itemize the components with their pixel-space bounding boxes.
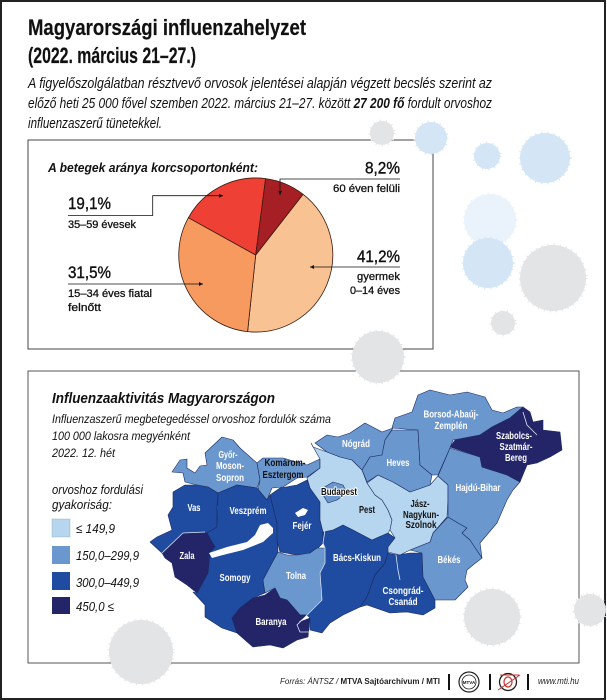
- panel: age groups frame: [28, 140, 433, 349]
- callout: 35-59 years: [68, 194, 223, 231]
- county labels: Fejér: [292, 521, 312, 532]
- legend: orvoshoz fordulási: [52, 483, 144, 497]
- county labels: Csanád: [388, 597, 418, 608]
- county labels: Esztergom: [262, 470, 304, 481]
- map description: Influenzaszerű megbetegedéssel orvoshoz fordulók száma: [52, 414, 331, 426]
- county labels: Baranya: [256, 617, 287, 628]
- county labels: Szolnok: [406, 520, 437, 531]
- county labels: Moson-: [216, 461, 244, 472]
- county labels: Vas: [188, 503, 201, 514]
- icon: MTVA logo: MTVA: [463, 680, 476, 685]
- divider bar: [448, 674, 450, 690]
- intro text: influenzaszerű tünetekkel.: [28, 116, 162, 132]
- callout: 35-59 years: 35–59 évesek: [68, 219, 136, 231]
- legend: 450,0 ≤: [76, 599, 114, 614]
- title: (2022. március 21–27.): [28, 43, 196, 68]
- callout: 0-14 years: [310, 247, 401, 297]
- callout: 60 years and over: 8,2%: [365, 158, 400, 178]
- county labels: Zala: [180, 551, 195, 562]
- map description: 2022. 12. hét: [51, 448, 116, 460]
- county labels: Hajdú-Bihar: [456, 483, 501, 494]
- county shapes: [150, 390, 562, 648]
- callout: 60 years and over: 60 éven felüli: [333, 183, 400, 195]
- county labels: Nógrád: [342, 439, 370, 450]
- county labels: [180, 410, 532, 628]
- intro text: előző heti 25 000 fővel szemben 2022. március 21–27. között 27 200 fő fordult orvoshoz: [28, 96, 493, 112]
- legend: [52, 483, 144, 614]
- source line: Forrás: ÁNTSZ / MTVA Sajtóarchívum / MTI: [280, 676, 440, 686]
- county labels: Somogy: [220, 573, 251, 584]
- callout: 15-34 years: [68, 263, 203, 314]
- county labels: Bereg: [505, 453, 527, 464]
- callout: 0-14 years: 0–14 éves: [350, 285, 400, 297]
- county labels: Bács-Kiskun: [333, 553, 381, 564]
- county labels: Pest: [359, 505, 376, 516]
- county labels: Jász-: [410, 499, 430, 510]
- intro text: A figyelőszolgálatban résztvevő orvosok jelentései alapján végzett becslés szerint az: [27, 76, 493, 92]
- callout: 0-14 years: gyermek: [357, 271, 401, 283]
- callout: 15-34 years: felnőtt: [68, 302, 101, 314]
- county labels: Borsod-Abaúj-: [424, 410, 478, 420]
- map of Hungary: [150, 390, 562, 648]
- county labels: Budapest: [321, 487, 358, 498]
- title: [28, 15, 307, 68]
- callout: 15-34 years: 15–34 éves fiatal: [68, 288, 152, 300]
- county labels: Zemplén: [434, 421, 468, 432]
- panel: map frame: [28, 371, 579, 663]
- callout: 60 years and over: [280, 158, 400, 195]
- county labels: Sopron: [216, 473, 244, 484]
- map description: 100 000 lakosra megyénként: [52, 431, 191, 443]
- icon: MTVA logo: [459, 672, 479, 692]
- county labels: Szatmár-: [500, 442, 532, 453]
- county labels: Heves: [386, 458, 410, 469]
- pie chart: [179, 178, 333, 332]
- panel heading: map: Influenzaaktivitás Magyarországon: [52, 390, 275, 407]
- intro text: [27, 76, 493, 132]
- callout: 15-34 years: 31,5%: [68, 263, 111, 282]
- county labels: Győr-: [218, 450, 238, 461]
- callout: 0-14 years: 41,2%: [357, 247, 400, 266]
- website: www.mti.hu: [538, 676, 579, 686]
- county labels: Tolna: [286, 571, 306, 582]
- decorative virus particles: [109, 121, 606, 684]
- county labels: Békés: [438, 555, 461, 566]
- legend: 300,0–449,9: [76, 575, 139, 590]
- county labels: Nagykun-: [403, 510, 439, 521]
- county labels: Komárom-: [264, 458, 306, 469]
- county labels: Szabolcs-: [496, 431, 532, 442]
- icon: MTI logo: [498, 674, 520, 690]
- legend: ≤ 149,9: [76, 521, 115, 536]
- panel heading: age groups: A betegek aránya korcsoportonként:: [47, 161, 258, 175]
- divider bar: [527, 674, 529, 690]
- county labels: Veszprém: [230, 506, 267, 517]
- county labels: Csongrád-: [382, 586, 424, 597]
- title: Magyarországi influenzahelyzet: [28, 15, 307, 40]
- legend: gyakoriság:: [52, 498, 112, 512]
- map description: [51, 414, 331, 460]
- legend: 150,0–299,9: [76, 548, 139, 563]
- callout: 35-59 years: 19,1%: [68, 194, 111, 213]
- divider bar: [489, 674, 491, 690]
